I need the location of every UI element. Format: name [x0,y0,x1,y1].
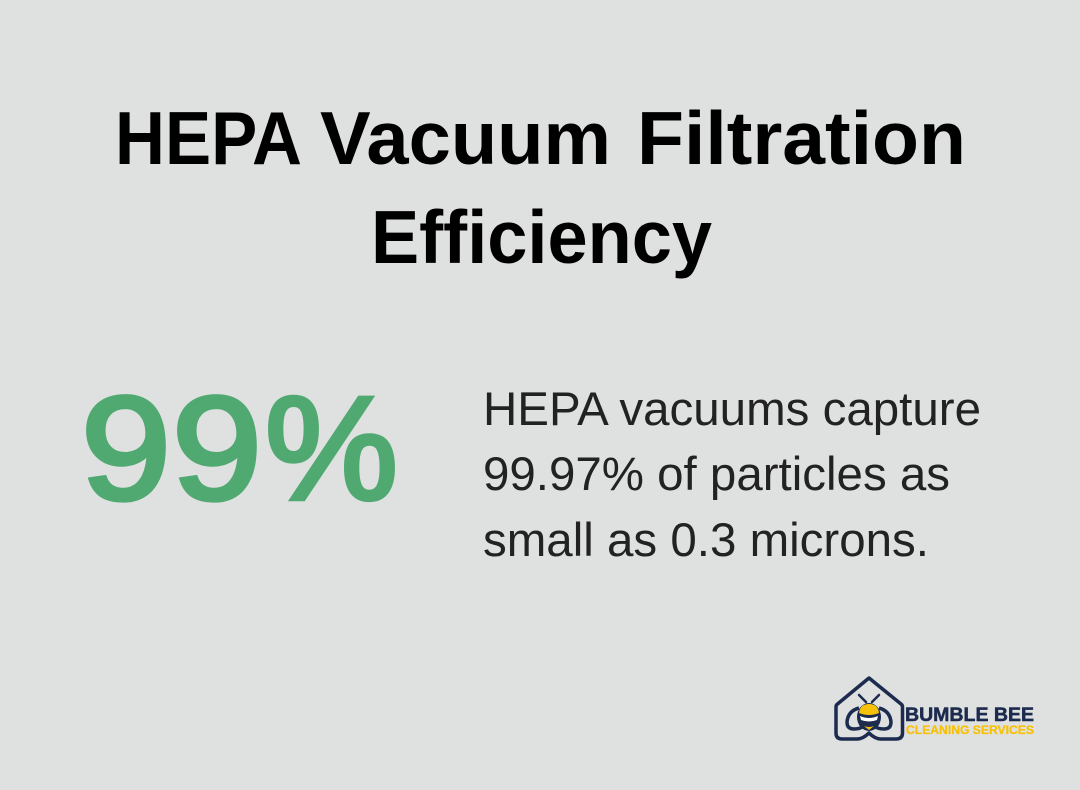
title [115,96,966,279]
description text [483,382,981,566]
title: Filtration [637,96,966,180]
big statistic: 99% [81,367,398,531]
title: Efficiency [371,195,712,279]
big statistic: 99%: 9 [81,367,171,531]
big statistic: 99%: % [265,367,398,531]
description text: 99.97% of particles as [483,447,950,500]
logo: Bumble Bee Cleaning Services [836,678,1034,739]
title: HEPA [115,96,302,180]
description text: HEPA vacuums capture [483,382,981,435]
big statistic: 99%: 9 [172,367,262,531]
description text: small as 0.3 microns. [483,513,929,566]
tagline: CLEANING SERVICES: CLEANING SERVICES [906,723,1034,737]
title: Vacuum [320,96,611,180]
wordmark: BUMBLE BEE: BUMBLE BEE [905,705,1034,726]
icon: house outline with bee [836,678,902,739]
